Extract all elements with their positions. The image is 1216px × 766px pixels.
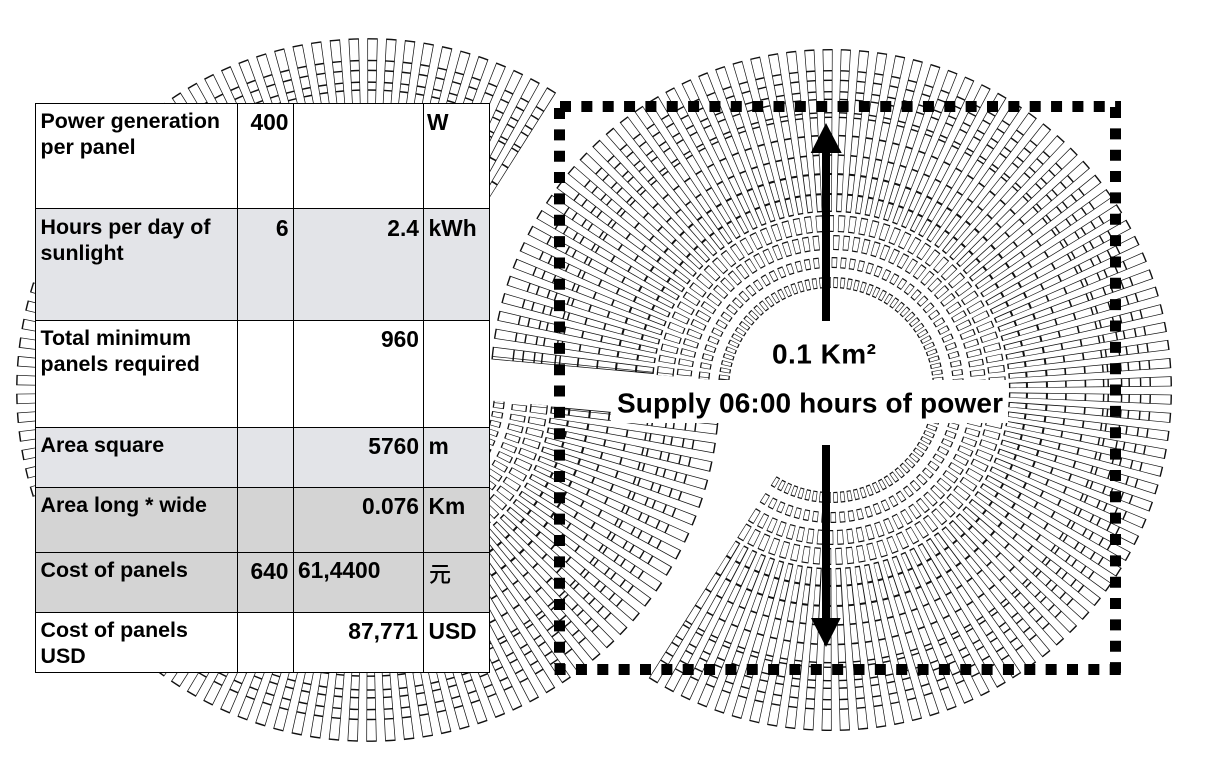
row: cost in USD [40,618,477,668]
row: power generation [40,109,449,159]
arrow: up [811,123,842,321]
row: hours of sunlight: Hours per day of [40,215,211,239]
row: cost of panels: 640 [250,558,288,584]
row: cost of panels: 61,4400 [298,557,380,583]
row: power generation: 400 [250,109,288,135]
row: cost of panels: Cost of panels [40,558,188,582]
data table [35,103,490,672]
row: area square: m [428,433,449,459]
row: power generation: per panel [40,135,136,159]
arrow: down [811,445,841,647]
supply label: Supply 06:00 hours of power [617,388,1003,418]
row: area long wide: 0.076 [362,493,419,519]
row: cost in USD: USD [428,618,477,644]
row: cost of panels [40,557,451,587]
row: hours of sunlight: 2.4 [387,215,419,241]
table grid [35,103,490,672]
row: hours of sunlight [40,215,477,265]
row: cost of panels: 元 [429,562,451,587]
left solar panel circular array [0,18,740,762]
row backgrounds [36,103,490,672]
row: power generation: Power generation [40,109,220,133]
row: hours of sunlight: 6 [276,215,288,241]
right solar panel circular array [491,49,1172,731]
row: cost in USD: Cost of panels [40,618,188,642]
row: total panels [40,326,419,376]
row: area square: Area square [40,433,164,457]
row: total panels: panels required [40,352,200,376]
white label band [611,380,1008,423]
row: power generation: W [427,109,449,135]
dotted square boundary [555,106,1121,675]
row: total panels: 960 [381,326,419,352]
row: area square [40,433,449,459]
area label: 0.1 Km² [772,338,876,370]
row: area long wide: Area long * wide [40,493,207,517]
row: cost in USD: 87,771 [348,618,418,644]
row: area square: 5760 [368,433,419,459]
row: hours of sunlight: sunlight [40,241,124,265]
row: hours of sunlight: kWh [428,215,477,241]
row: area long wide: Km [428,493,465,519]
row: total panels: Total minimum [40,326,191,350]
row: cost in USD: USD [40,644,86,668]
row: area long wide [40,493,465,519]
